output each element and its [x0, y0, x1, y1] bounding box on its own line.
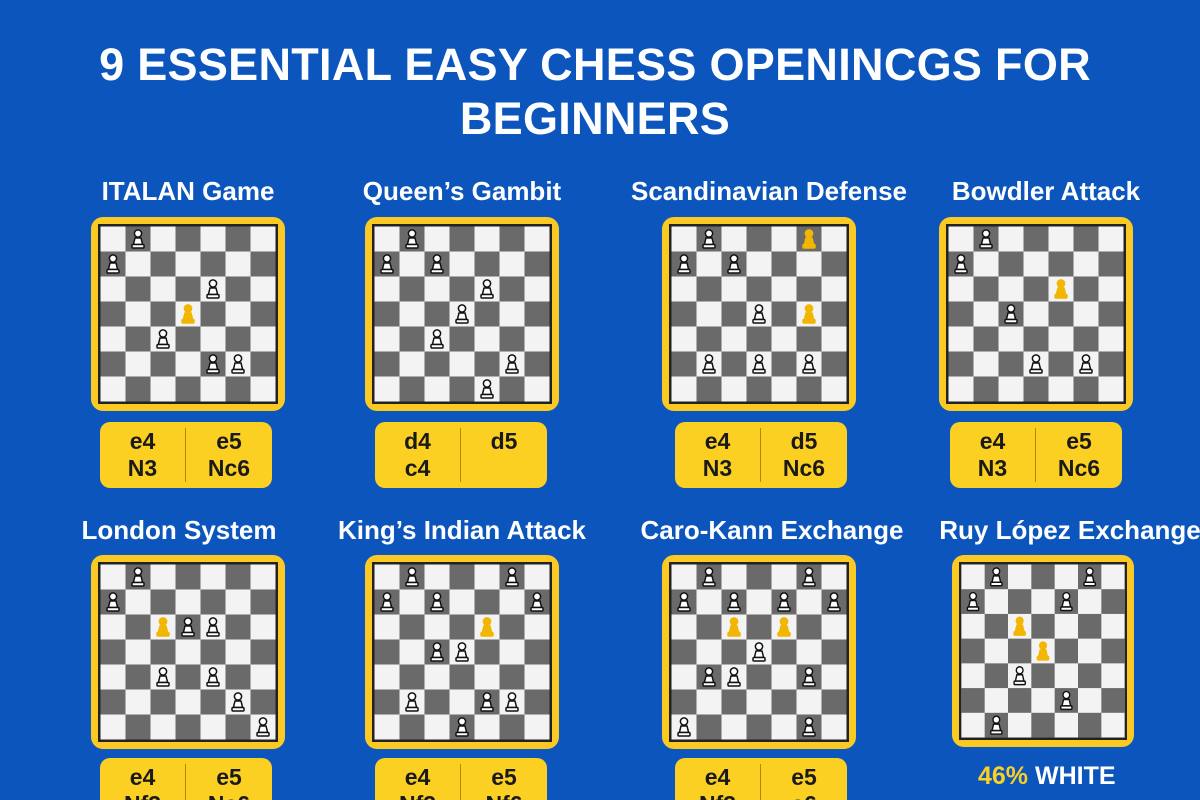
moves: Queen's Gambit — [375, 422, 547, 488]
heading: Caro-Kann Exchange: Caro-Kann Exchange — [641, 515, 903, 545]
board: Italian Game — [91, 217, 285, 411]
moves: Caro-Kann Exchange: e4 — [705, 764, 730, 790]
moves: Scandinavian Defense: e4 — [705, 428, 730, 454]
moves: Scandinavian Defense — [675, 422, 847, 488]
moves: Italian Game: N3 — [128, 455, 157, 481]
moves: Queen's Gambit: d4 — [404, 428, 431, 454]
moves: Bowdler Attack: Nc6 — [1058, 455, 1100, 481]
board: King's Indian Attack — [365, 555, 559, 749]
moves: Italian Game: e4 — [130, 428, 155, 454]
moves: King's Indian Attack: e5 — [491, 764, 517, 790]
moves: Italian Game: Nc6 — [208, 455, 250, 481]
moves: London System — [100, 758, 272, 800]
moves: Caro-Kann Exchange — [675, 758, 847, 800]
board: Ruy Lopez Exchange — [952, 555, 1134, 747]
heading: Queen's Gambit: Queen’s Gambit — [363, 176, 561, 206]
heading: Italian Game: ITALAN Game — [102, 176, 274, 206]
moves: Queen's Gambit: c4 — [405, 455, 430, 481]
moves: Queen's Gambit: d5 — [491, 428, 517, 454]
moves: Italian Game — [100, 422, 272, 488]
moves: Bowdler Attack: e5 — [1066, 428, 1092, 454]
heading: Bowdler Attack: Bowdler Attack — [952, 176, 1140, 206]
heading: Ruy Lopez Exchange: Ruy López Exchange — [939, 515, 1200, 545]
moves: King's Indian Attack — [375, 758, 547, 800]
moves: London System: e5 — [216, 764, 242, 790]
title: BEGINNERS — [460, 93, 730, 144]
moves: Bowdler Attack — [950, 422, 1122, 488]
title — [99, 39, 1091, 144]
board: Bowdler Attack — [939, 217, 1133, 411]
board: London System — [91, 555, 285, 749]
moves: Italian Game: e5 — [216, 428, 242, 454]
moves: Bowdler Attack: N3 — [978, 455, 1007, 481]
moves: Caro-Kann Exchange: e5 — [791, 764, 817, 790]
heading: King's Indian Attack: King’s Indian Attack — [338, 515, 586, 545]
moves: Bowdler Attack: e4 — [980, 428, 1005, 454]
moves: Scandinavian Defense: Nc6 — [783, 455, 825, 481]
board: Scandinavian Defense — [662, 217, 856, 411]
stat: 46% white: 46% WHITE — [978, 762, 1116, 790]
board: Caro-Kann Exchange — [662, 555, 856, 749]
moves: London System: e4 — [130, 764, 155, 790]
board: Queen's Gambit — [365, 217, 559, 411]
moves: Scandinavian Defense: d5 — [791, 428, 817, 454]
heading: Scandinavian Defense: Scandinavian Defense — [631, 176, 907, 206]
title: 9 ESSENTIAL EASY CHESS OPENINCGS FOR — [99, 39, 1091, 90]
moves: Scandinavian Defense: N3 — [703, 455, 732, 481]
moves: King's Indian Attack: e4 — [405, 764, 430, 790]
heading: London System: London System — [81, 515, 276, 545]
